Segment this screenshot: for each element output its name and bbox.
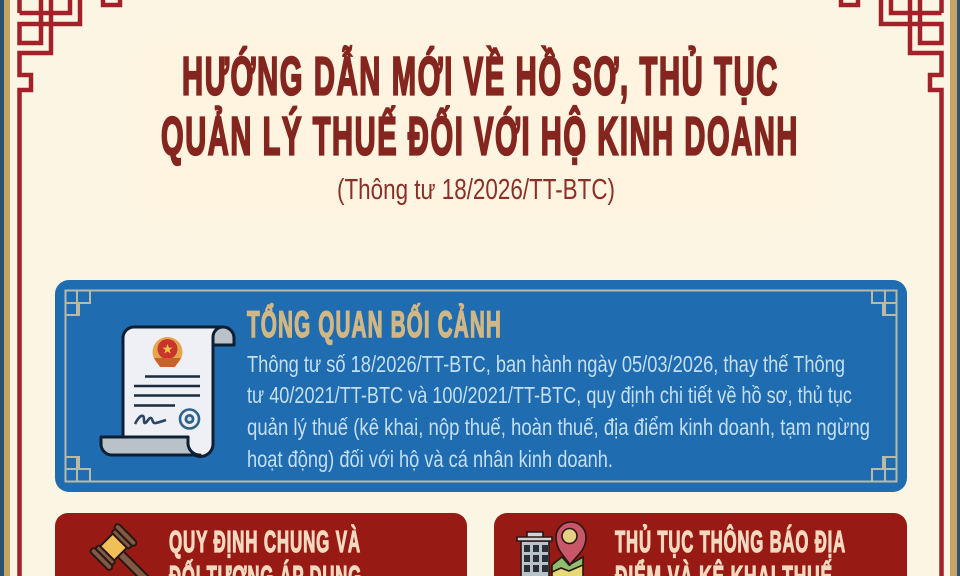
panel: general rules [55,513,467,576]
heading: overview: TỔNG QUAN BỐI CẢNH [247,302,502,345]
icon: seal [180,410,199,428]
icon: gavel [89,523,166,576]
ornamental frame: top left [20,0,120,576]
ornamental frame: top right [841,0,942,576]
panel: location notice [494,513,907,576]
icon: building and map pin [517,522,586,576]
icon: decree scroll [101,327,234,456]
text block: overview: hoạt động) đối với hộ và cá nhân kinh doanh. [247,446,613,472]
heading: general rules [169,524,362,576]
subtitle: (Thông tư 18/2026/TT-BTC) [337,174,615,206]
panel frame [66,290,896,482]
heading: location notice [615,523,846,576]
icon: document lines [134,376,200,406]
heading: general rules: QUY ĐỊNH CHUNG VÀ [169,524,361,559]
panel: overview [55,280,907,492]
text block: overview [247,351,870,472]
icon: national emblem [152,337,182,367]
icon: signature [135,416,166,424]
title [161,46,799,166]
